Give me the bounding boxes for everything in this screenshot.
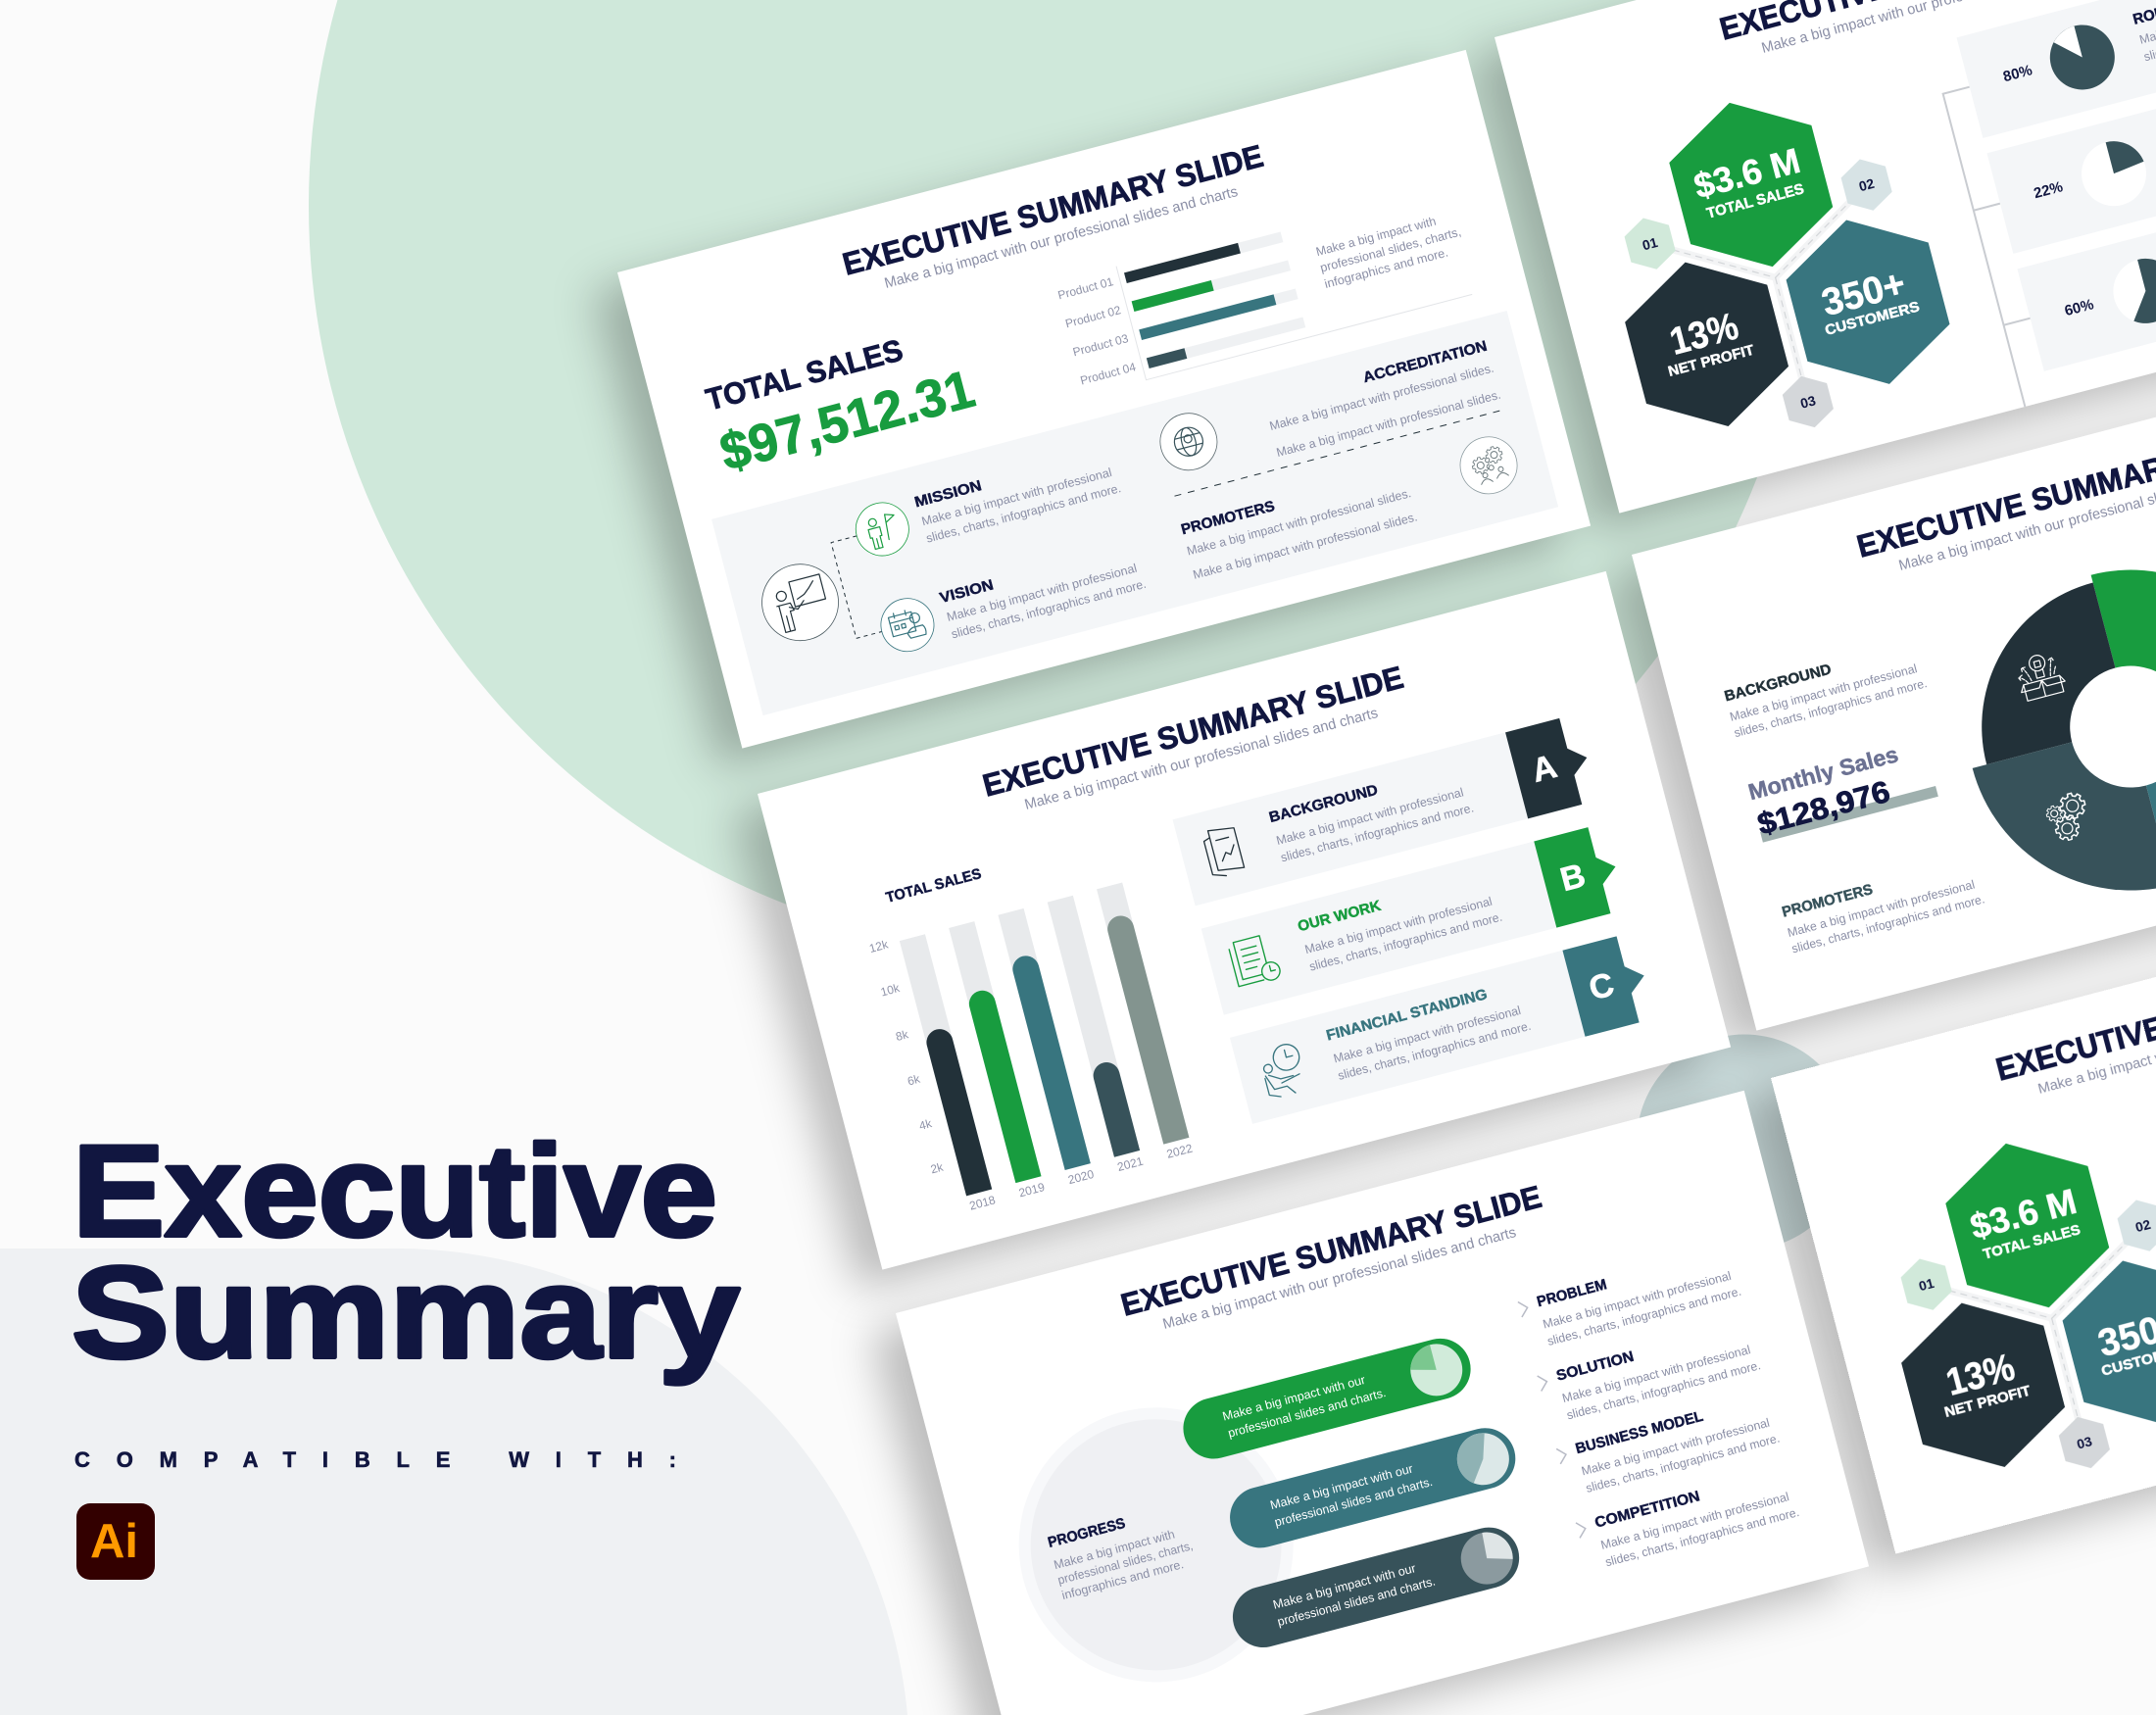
- progress circle: [989, 1377, 1324, 1712]
- icon: person at desk with clock: [1258, 1042, 1308, 1100]
- icon: idea box: [2013, 650, 2068, 702]
- slide 5: monthly sales donut: [1632, 332, 2156, 1031]
- panel: 22% pie: [1986, 51, 2156, 254]
- icon: Adobe Illustrator badge: [76, 1503, 155, 1580]
- hexagon: net profit: [1890, 1285, 2076, 1486]
- list item: competition: Make a big impact with professional: [1599, 1490, 1790, 1552]
- progress circle: Make a big impact with: [1053, 1527, 1176, 1572]
- text: background: slides, charts, infographics and more.: [1733, 676, 1929, 740]
- slide subtitle: Make a big impact with our professional slides and charts: [883, 183, 1240, 292]
- text: accreditation: Make a big impact with professional slides.: [1268, 362, 1495, 433]
- compatible with label: COMPATIBLE WITH:: [74, 1447, 676, 1472]
- slide 4: hexagon stats and pies: [1494, 0, 2156, 514]
- pill: teal progress: Make a big impact with our: [1269, 1462, 1414, 1512]
- text: accreditation: Make a big impact with professional slides.: [1275, 388, 1502, 460]
- ribbon A: A: [1528, 748, 1560, 790]
- text: promoters: Make a big impact with professional slides.: [1186, 486, 1412, 559]
- row A: background: slides, charts, infographics and more.: [1279, 801, 1475, 864]
- slide 2: bar chart and A B C list: [758, 571, 1731, 1270]
- progress circle: PROGRESS: [1046, 1515, 1127, 1551]
- text: promoters: slides, charts, infographics and more.: [1790, 892, 1986, 956]
- pill: green progress: [1177, 1332, 1477, 1465]
- slide 3: progress pills and list: [896, 1091, 1869, 1715]
- list item: business model: BUSINESS MODEL: [1574, 1408, 1705, 1457]
- list item: problem: PROBLEM: [1535, 1276, 1608, 1310]
- hexagon: customers: CUSTOMERS: [1824, 299, 1922, 339]
- hexagon: customers: 350+: [1818, 263, 1910, 324]
- product bar chart: [1054, 180, 1472, 396]
- total sales heading: TOTAL SALES: [703, 332, 906, 417]
- hexagon: total sales: [1658, 84, 1843, 285]
- text: mission: MISSION: [912, 477, 983, 511]
- small hexagon 02: 02: [1857, 175, 1876, 194]
- slide shadows: [593, 0, 2156, 1613]
- text: background: BACKGROUND: [1723, 661, 1834, 705]
- list item: problem: slides, charts, infographics and more.: [1545, 1285, 1742, 1348]
- list item: solution: Make a big impact with professional: [1561, 1343, 1752, 1405]
- list item: business model: [1555, 1391, 1782, 1500]
- product bar chart: Product 04: [1079, 360, 1138, 387]
- row C: financial standing: [1230, 932, 1655, 1124]
- bar chart: total sales by year: 2019: [1017, 1180, 1047, 1200]
- icon: gears: [2042, 791, 2093, 844]
- hexagon: total sales: [1935, 1125, 2120, 1326]
- list item: problem: Make a big impact with professional: [1542, 1269, 1733, 1332]
- bar chart: total sales by year: 2020: [1066, 1167, 1096, 1187]
- list item: competition: [1575, 1464, 1800, 1574]
- row B: our work: Make a big impact with professional: [1303, 895, 1494, 956]
- small hexagon 01: [1897, 1253, 1955, 1316]
- row A: background: Make a big impact with professional: [1275, 785, 1465, 848]
- slide 6: hexagon stats repeat: [1771, 856, 2156, 1554]
- hexagon: total sales: TOTAL SALES: [1705, 180, 1806, 222]
- slide title: EXECUTIVE SUMMARY SLIDE: [979, 660, 1407, 804]
- small hexagon 01: 01: [1641, 234, 1659, 253]
- monthly sales callout: [1745, 734, 1938, 843]
- ribbon A: [1505, 714, 1598, 818]
- row B: our work: OUR WORK: [1296, 898, 1383, 935]
- small hexagon 03: [2055, 1411, 2113, 1474]
- icon: vision calendar: [875, 593, 940, 658]
- small hexagon 02: [1838, 154, 1895, 217]
- text: mission: slides, charts, infographics and more.: [925, 481, 1122, 546]
- main title: [72, 1119, 740, 1386]
- hexagon: customers: [2052, 1242, 2156, 1444]
- hexagon connectors: [1926, 1226, 2156, 1471]
- text: promoters: [1179, 464, 1419, 582]
- small hexagon 02: [2114, 1195, 2156, 1257]
- hexagon: net profit: 13%: [1666, 305, 1742, 364]
- bar chart: total sales by year: 10k: [879, 981, 902, 999]
- panel: mission, vision, accreditation, promoters: [711, 311, 1558, 715]
- pill: teal progress: professional slides and charts.: [1273, 1475, 1434, 1530]
- small hexagon 02: 02: [2133, 1216, 2152, 1235]
- pill: green progress: Make a big impact with our: [1221, 1373, 1367, 1424]
- text: vision: [938, 539, 1148, 642]
- bracket lines: [1943, 87, 2051, 407]
- text: accreditation: [1262, 337, 1502, 460]
- panel: 80% pie: 80%: [2001, 62, 2034, 85]
- text: vision: slides, charts, infographics and more.: [950, 577, 1148, 641]
- progress circle: professional slides, charts,: [1056, 1539, 1195, 1588]
- slide subtitle: Make a big impact with our professional slides and charts: [1161, 1224, 1518, 1333]
- list item: problem: [1517, 1244, 1742, 1353]
- panel: 80% pie: [1957, 0, 2156, 138]
- main title: Summary: [72, 1241, 740, 1386]
- product bar chart: Product 03: [1071, 331, 1130, 359]
- progress circle: infographics and more.: [1060, 1557, 1185, 1602]
- background shape: grey hill: [0, 1249, 907, 1715]
- chart description: [1314, 209, 1467, 291]
- row A: background: [1173, 714, 1598, 906]
- slide title: EXECUTIVE SUMMARY SLIDE: [1117, 1179, 1545, 1323]
- text: promoters: Make a big impact with professional slides.: [1192, 510, 1419, 582]
- pie icon: [1451, 1427, 1515, 1491]
- row B: our work: [1201, 823, 1627, 1015]
- slide 1: total sales overview: [617, 50, 1591, 749]
- list item: solution: [1537, 1317, 1762, 1427]
- panel: 22% pie: 22%: [2032, 178, 2065, 202]
- text: accreditation: ACCREDITATION: [1361, 338, 1489, 386]
- background shape: mint circle: [309, 0, 1808, 956]
- row A: background: BACKGROUND: [1267, 782, 1380, 826]
- hexagon: total sales: TOTAL SALES: [1982, 1221, 2082, 1263]
- text: background: [1723, 638, 1929, 740]
- list item: solution: slides, charts, infographics and more.: [1565, 1358, 1762, 1422]
- chart description: professional slides, charts,: [1319, 224, 1462, 275]
- product bar chart: Product 02: [1064, 303, 1123, 330]
- text: promoters: PROMOTERS: [1179, 498, 1277, 538]
- pie icon: [1404, 1339, 1468, 1401]
- list item: competition: COMPETITION: [1593, 1488, 1701, 1532]
- list item: business model: slides, charts, infographics and more.: [1585, 1432, 1782, 1495]
- product bar chart: Product 01: [1056, 274, 1115, 302]
- icon: Adobe Illustrator badge: Ai: [90, 1515, 138, 1568]
- bar chart: total sales by year: 2021: [1116, 1154, 1145, 1174]
- icon: papers and clock: [1228, 933, 1282, 989]
- bar chart: total sales by year: 6k: [906, 1071, 922, 1089]
- pill: teal progress: [1223, 1421, 1522, 1554]
- small hexagon 01: [1621, 213, 1679, 275]
- bar chart: total sales by year: 8k: [895, 1027, 910, 1044]
- slide subtitle: Make a big impact with our professional slides and charts: [1023, 705, 1380, 813]
- icon: presenter: [754, 556, 847, 649]
- hexagon: net profit: NET PROFIT: [1943, 1384, 2033, 1421]
- pie icon: [1455, 1527, 1519, 1590]
- ribbon B: B: [1556, 857, 1590, 899]
- list item: business model: Make a big impact with professional: [1580, 1416, 1771, 1478]
- small hexagon 03: 03: [1798, 392, 1818, 412]
- list item: solution: SOLUTION: [1554, 1348, 1636, 1385]
- bar chart: total sales by year: 2022: [1165, 1141, 1195, 1161]
- text: promoters: [1781, 855, 1986, 956]
- hexagon: customers: [1776, 201, 1961, 403]
- small hexagon 01: 01: [1917, 1275, 1936, 1294]
- slide title: EXECUTIVE SUMMARY SLIDE: [839, 138, 1267, 282]
- pill: green progress: professional slides and charts.: [1227, 1386, 1388, 1441]
- hexagon: total sales: $3.6 M: [1966, 1181, 2081, 1247]
- icon: mission flag: [850, 497, 914, 562]
- hexagon: net profit: [1614, 244, 1799, 445]
- hexagon: total sales: $3.6 M: [1690, 140, 1804, 206]
- hexagon connectors: [1649, 185, 1916, 430]
- icon: gears and people: [1454, 430, 1523, 500]
- bar chart: total sales by year: 4k: [917, 1116, 934, 1133]
- icon: report document: [1201, 824, 1246, 879]
- text: mission: [912, 443, 1122, 546]
- pill: dark progress: professional slides and charts.: [1276, 1575, 1437, 1629]
- main title: Executive: [73, 1119, 717, 1264]
- donut chart: [1933, 535, 2156, 926]
- small hexagon 03: [1779, 370, 1837, 433]
- row C: financial standing: FINANCIAL STANDING: [1325, 986, 1489, 1044]
- monthly sales callout: $128,976: [1754, 774, 1893, 842]
- small hexagon 03: 03: [2075, 1433, 2094, 1452]
- background shape: teal circle: [1637, 1035, 1852, 1250]
- ribbon C: [1562, 932, 1655, 1037]
- chart description: Make a big impact with: [1314, 215, 1438, 259]
- ribbon B: [1534, 823, 1627, 928]
- pill: dark progress: Make a big impact with our: [1271, 1561, 1417, 1612]
- hexagon: net profit: NET PROFIT: [1667, 343, 1756, 380]
- text: mission: Make a big impact with professional: [920, 466, 1113, 528]
- icon: globe: [1154, 407, 1223, 476]
- row C: financial standing: slides, charts, infographics and more.: [1337, 1019, 1533, 1083]
- text: promoters: Make a big impact with professional: [1786, 877, 1977, 940]
- bar chart: total sales by year: [867, 876, 1195, 1221]
- row C: financial standing: Make a big impact with professional: [1332, 1004, 1522, 1065]
- total sales value: $97,512.31: [714, 360, 980, 482]
- ribbon C: C: [1585, 965, 1618, 1007]
- row B: our work: slides, charts, infographics and more.: [1308, 910, 1503, 974]
- bar chart: total sales by year: 2k: [929, 1159, 946, 1176]
- monthly sales callout: Monthly Sales: [1745, 741, 1901, 805]
- text: vision: Make a big impact with professional: [946, 562, 1139, 624]
- text: vision: VISION: [938, 576, 996, 607]
- list item: competition: slides, charts, infographics and more.: [1604, 1505, 1800, 1569]
- panel: 60% pie: 60%: [2063, 296, 2095, 319]
- chart heading: TOTAL SALES: [884, 865, 983, 906]
- hexagon: net profit: 13%: [1942, 1346, 2019, 1404]
- chart description: infographics and more.: [1323, 245, 1449, 291]
- text: promoters: PROMOTERS: [1781, 881, 1875, 921]
- panel: 60% pie: [2017, 167, 2156, 371]
- pill: dark progress: [1226, 1521, 1526, 1654]
- text: background: Make a big impact with professional: [1729, 662, 1919, 724]
- bar chart: total sales by year: 2018: [968, 1193, 997, 1213]
- bar chart: total sales by year: 12k: [867, 937, 891, 956]
